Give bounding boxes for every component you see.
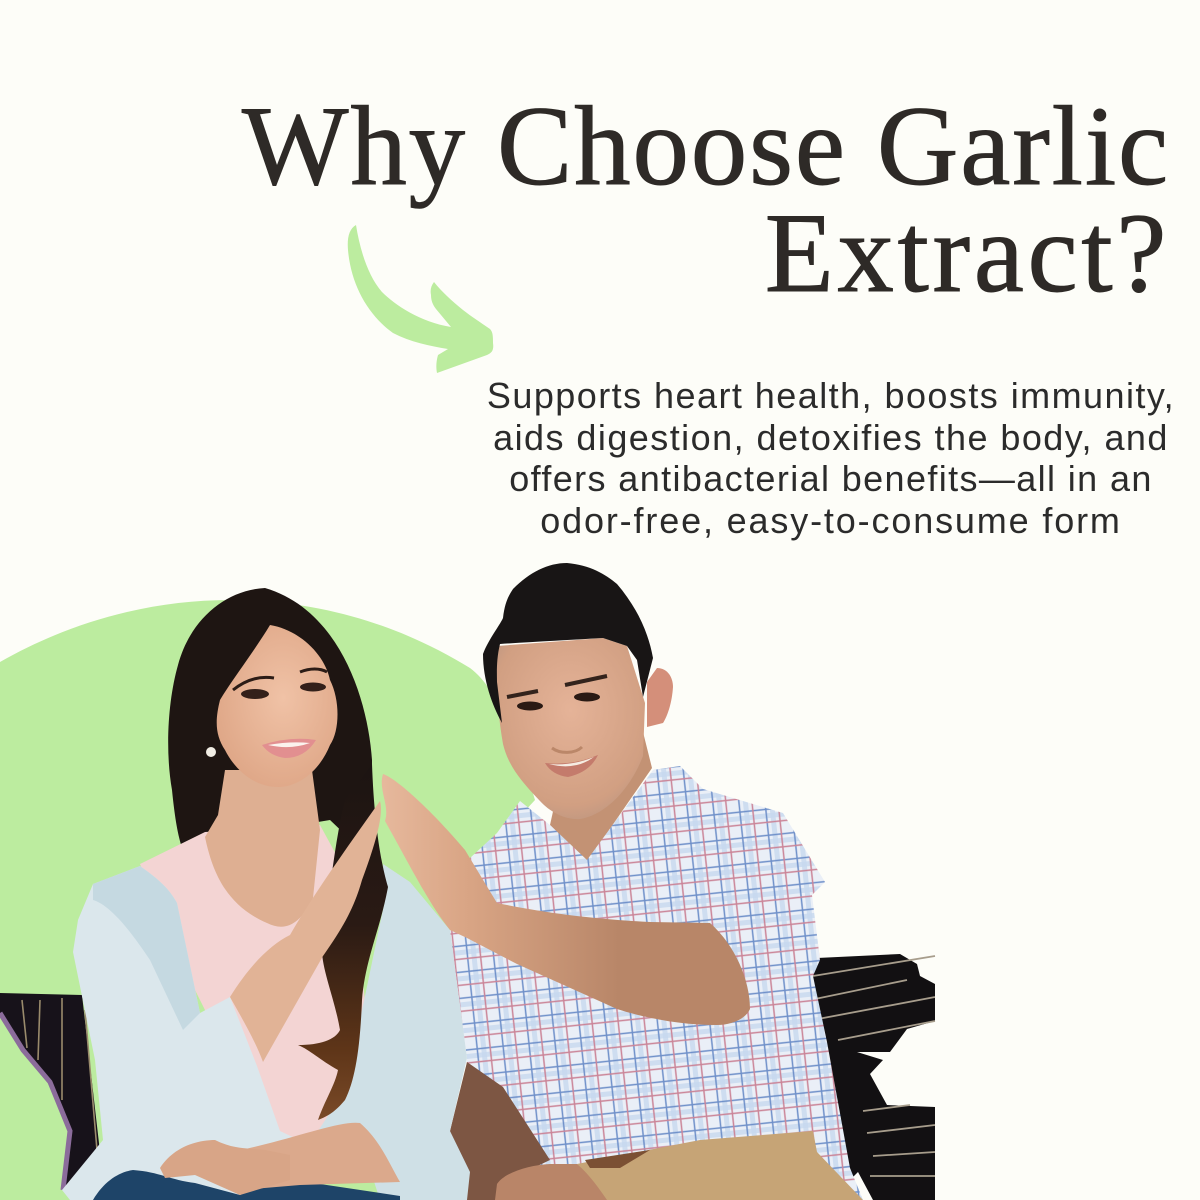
green background circle (0, 600, 535, 1200)
icon: curved green arrow (348, 225, 494, 373)
body text: odor-free, easy-to-consume form (540, 500, 1122, 541)
lower arm (450, 1062, 550, 1200)
title: Extract? (765, 191, 1170, 316)
brows (507, 676, 607, 697)
mouth (545, 755, 598, 777)
right cushion and chair (812, 954, 935, 1200)
title (242, 84, 1170, 316)
body text: aids digestion, detoxifies the body, and (493, 417, 1169, 458)
eyes (241, 682, 326, 699)
mouth (262, 739, 316, 758)
lower hand (160, 1140, 290, 1195)
shawl fold (93, 866, 200, 1030)
neck and chest (205, 770, 320, 927)
neck (550, 720, 652, 862)
raised forearm and hand (230, 801, 381, 1062)
body text (487, 375, 1175, 541)
hand on leg (495, 1164, 607, 1200)
face (496, 638, 645, 819)
left cushion (0, 993, 100, 1190)
pink top (140, 825, 365, 1150)
face (217, 625, 338, 787)
shawl right (318, 864, 470, 1200)
body text: offers antibacterial benefits—all in an (509, 458, 1153, 499)
plaid shirt (450, 766, 863, 1200)
body text: Supports heart health, boosts immunity, (487, 375, 1175, 416)
belt (585, 1150, 650, 1168)
woman (62, 588, 470, 1200)
ear (647, 668, 673, 727)
earring (206, 747, 216, 757)
hair back (168, 588, 372, 860)
brows (233, 669, 327, 690)
man: head (483, 563, 673, 819)
eyes (517, 692, 600, 710)
jeans (93, 1170, 400, 1200)
trousers (577, 1131, 863, 1200)
long hair strand (298, 764, 388, 1120)
nose shadow (552, 747, 582, 752)
title: Why Choose Garlic (242, 84, 1170, 209)
lower arm (240, 1123, 400, 1190)
man: raised forearm and hand (382, 774, 750, 1025)
man: torso (450, 720, 863, 1200)
shawl left (62, 866, 320, 1200)
hair (483, 563, 653, 723)
